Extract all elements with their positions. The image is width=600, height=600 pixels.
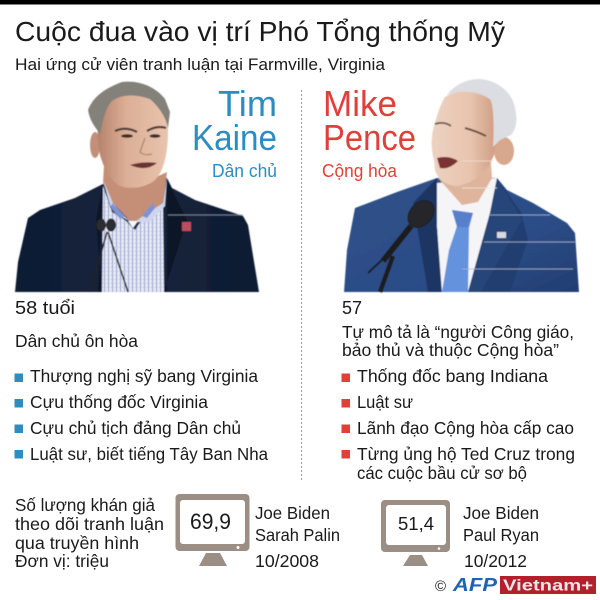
audience label: theo dõi tranh luận	[15, 514, 164, 534]
debate 2012: 10/2012	[464, 551, 527, 571]
title: Cuộc đua vào vị trí Phó Tổng thống Mỹ	[15, 16, 505, 47]
name: Tim Kaine: Tim	[218, 83, 277, 124]
credit: AFP Vietnam+: ©	[435, 578, 446, 595]
list: Pence	[342, 366, 575, 483]
name: Mike Pence: Cộng hòa	[322, 161, 398, 181]
Pence description	[342, 322, 574, 360]
audience label	[15, 495, 164, 571]
debate 2012: Joe Biden	[463, 503, 539, 523]
icon: monitor 2012	[381, 500, 450, 566]
debate 2008: Sarah Palin	[255, 525, 340, 545]
name: Tim Kaine: Kaine	[192, 117, 277, 158]
list: Pence: các cuộc bầu cử sơ bộ	[357, 463, 527, 483]
center divider	[300, 90, 302, 480]
Kaine description: Dân chủ ôn hòa	[15, 331, 138, 351]
photo: Tim Kaine	[15, 82, 259, 292]
list: Kaine: Thượng nghị sỹ bang Virginia	[30, 366, 258, 386]
Pence description: Tự mô tả là “người Công giáo,	[342, 322, 574, 342]
Kaine age: 58 tuổi	[15, 297, 75, 318]
audience label: Số lượng khán giả	[15, 495, 155, 515]
list: Pence: Luật sư	[357, 392, 413, 412]
icon: monitor 2008: 69,9	[190, 509, 231, 534]
debate 2008: 10/2008	[255, 551, 319, 571]
list: Kaine: Cựu thống đốc Virginia	[30, 392, 208, 412]
icon: monitor 2008	[176, 494, 250, 566]
list: Kaine	[14, 366, 268, 464]
list: Kaine: Cựu chủ tịch đảng Dân chủ	[30, 418, 241, 438]
list: Pence: Lãnh đạo Cộng hòa cấp cao	[357, 418, 574, 438]
list: Kaine: Luật sư, biết tiếng Tây Ban Nha	[30, 444, 268, 464]
name: Mike Pence	[322, 83, 416, 181]
credit: AFP Vietnam+: AFP	[452, 575, 498, 595]
debate 2012	[463, 503, 539, 571]
audience label: qua truyền hình	[15, 533, 139, 553]
subtitle: Hai ứng cử viên tranh luận tại Farmville, Virginia	[15, 55, 386, 74]
name: Mike Pence: Pence	[323, 117, 416, 158]
name: Mike Pence: Mike	[323, 83, 397, 124]
name: Tim Kaine	[192, 83, 277, 181]
icon: monitor 2012: 51,4	[398, 514, 434, 534]
Pence age: 57	[342, 297, 362, 318]
list: Pence: Thống đốc bang Indiana	[357, 366, 548, 386]
debate 2012: Paul Ryan	[463, 525, 539, 545]
audience label: Đơn vị: triệu	[15, 551, 109, 571]
debate 2008	[255, 503, 340, 571]
top bar	[0, 0, 600, 4]
credit: AFP Vietnam+: Vietnam+	[503, 578, 593, 594]
photo: Mike Pence	[344, 79, 579, 292]
name: Tim Kaine: Dân chủ	[212, 161, 277, 181]
credit: AFP Vietnam+	[435, 575, 596, 595]
debate 2008: Joe Biden	[255, 503, 330, 523]
list: Pence: Từng ủng hộ Ted Cruz trong	[357, 444, 575, 464]
Pence description: bảo thủ và thuộc Cộng hòa”	[342, 340, 559, 360]
